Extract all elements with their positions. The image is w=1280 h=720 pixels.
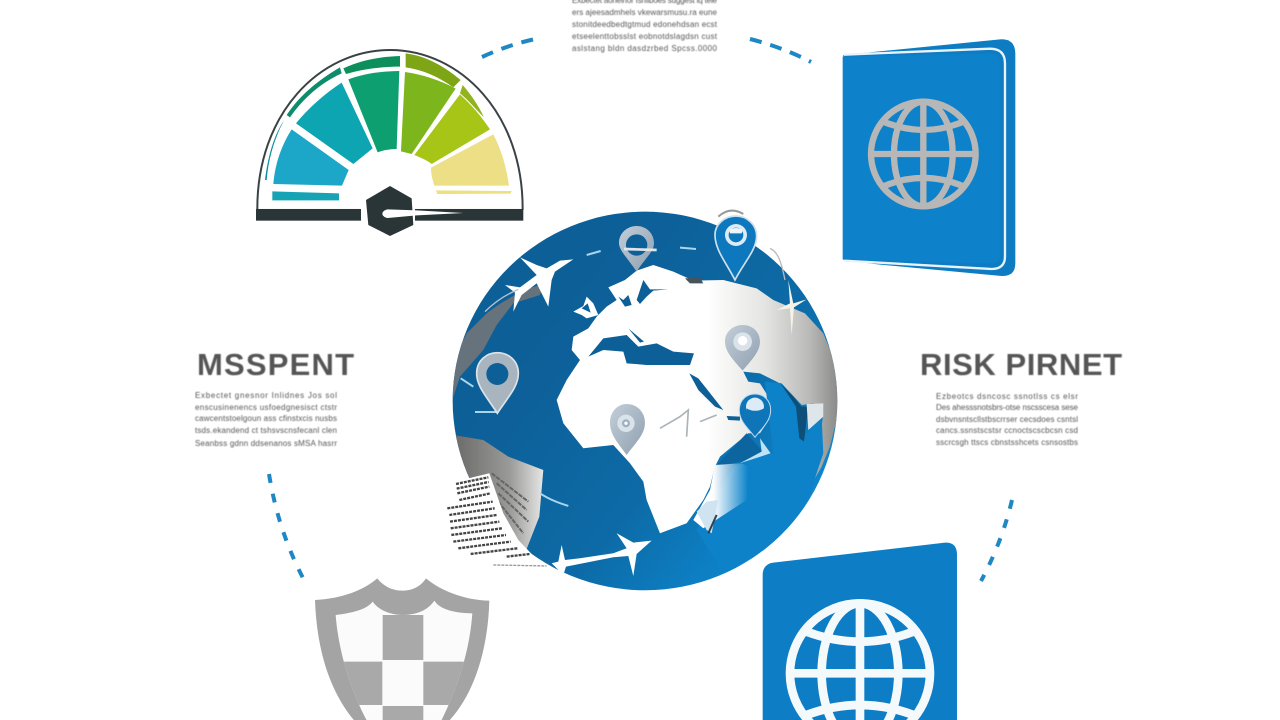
- text block: left: Exbectet gnesnor Inlidnes Jos sol: [195, 391, 337, 400]
- east Africa fade: [693, 463, 748, 528]
- heading: MSSPENT: MSSPENT: [197, 347, 354, 382]
- north-west grey land: [452, 286, 541, 399]
- plane right: [770, 248, 807, 335]
- gauge segment 1: [273, 129, 349, 186]
- passport front cover: [843, 53, 1000, 264]
- text block: right: [936, 392, 1079, 447]
- text block: left: Seanbss gdnn ddsenanos sMSA hasrr: [195, 439, 337, 448]
- text block: right: Des ahesssnotsbrs-otse nscsscesa sese: [936, 403, 1079, 412]
- gauge segment 3: [348, 71, 399, 152]
- passport globe emblem: [871, 102, 976, 206]
- gauge outer band: [265, 53, 484, 180]
- globe ocean: [453, 212, 837, 590]
- India sliver: [780, 383, 808, 442]
- document sheets: [442, 473, 547, 567]
- gauge base bar: [256, 209, 523, 221]
- text block: left: enscusinenencs usfoedgnesisct ctstr: [195, 403, 337, 412]
- text block: right: Ezbeotcs dsncosc ssnotlss cs elsr: [936, 392, 1078, 401]
- British Isles: [573, 297, 598, 318]
- dashed connector: bottom right: [981, 500, 1012, 581]
- globe: [450, 211, 840, 590]
- gauge segment 4: [401, 72, 456, 154]
- shield inner: [336, 601, 472, 720]
- icon: passport bottom right: [763, 543, 957, 720]
- gauge segment 5: [414, 94, 490, 164]
- location pin: top grey: [619, 226, 657, 272]
- text block: top: [572, 0, 718, 53]
- dashed connector: bottom left: [269, 474, 303, 578]
- plane upper left: [485, 257, 573, 312]
- passport back cover: [843, 39, 1015, 276]
- gauge outer arc: [257, 50, 523, 210]
- heading: RISK PIRNET: RISK PIRNET: [920, 347, 1122, 382]
- passport globe emblem: [790, 603, 930, 720]
- shield outer: [315, 578, 489, 720]
- gauge hub and needle: [366, 186, 463, 236]
- text block: top: etseelenttobsslst eobnotdslagdsn cust: [572, 32, 718, 41]
- Mediterranean Sea: [588, 335, 694, 365]
- eurasia and africa landmass: [557, 265, 840, 533]
- icon: passport top right: [843, 39, 1015, 276]
- icon: risk gauge: [256, 50, 523, 236]
- dashed connector: top left: [482, 38, 540, 57]
- Arabian notch: [717, 433, 762, 465]
- Baltic dark water: [618, 295, 632, 307]
- flight dashes: [461, 248, 696, 506]
- Indian Ocean water: [697, 382, 823, 573]
- plane bottom: [552, 533, 652, 576]
- Red Sea: [689, 373, 723, 410]
- icon: shield: [315, 578, 489, 720]
- Africa faint route mark: [660, 410, 717, 437]
- gauge bottom strips: [272, 190, 512, 200]
- location pin: top blue: [715, 211, 757, 280]
- text block: right: sscrcsgh ttscs cbnstsshcets csnsostbs: [936, 438, 1078, 447]
- location pin: Africa grey: [610, 404, 645, 455]
- shield checker: [344, 615, 464, 720]
- text block: right: cancs.ssnstscstsr ccnoctscscbcsn csd: [936, 426, 1078, 435]
- text block: top: ers ajeesadmhels vkewarsmusu.ra eune: [572, 8, 718, 17]
- text block: left: tsds.ekandend ct tshsvscnsfecanl clen: [195, 426, 337, 435]
- passport cover: [763, 543, 957, 720]
- location pin: left grey: [477, 353, 518, 413]
- dashed connector: top right: [750, 39, 811, 62]
- location pin: right grey: [725, 325, 760, 371]
- text block: left: cawcentstoelgoun ass cfinstxcis nusbs: [195, 414, 337, 423]
- text block: right: dsbvnsntscllstbscrrser cecsdoes csntsl: [936, 415, 1078, 424]
- text block: left: [195, 391, 337, 448]
- gauge segment 2: [296, 83, 373, 164]
- text block: top: aslstang bldn dasdzrbed Spcss.0000: [572, 44, 718, 53]
- passport page edge: [844, 49, 1005, 269]
- location pin: east blue: [739, 394, 771, 437]
- gauge segment 6: [431, 134, 509, 186]
- text block: top: stonitdeedbedtgtmud edonehdsan ecst: [572, 20, 718, 29]
- south america grey land: [453, 435, 543, 553]
